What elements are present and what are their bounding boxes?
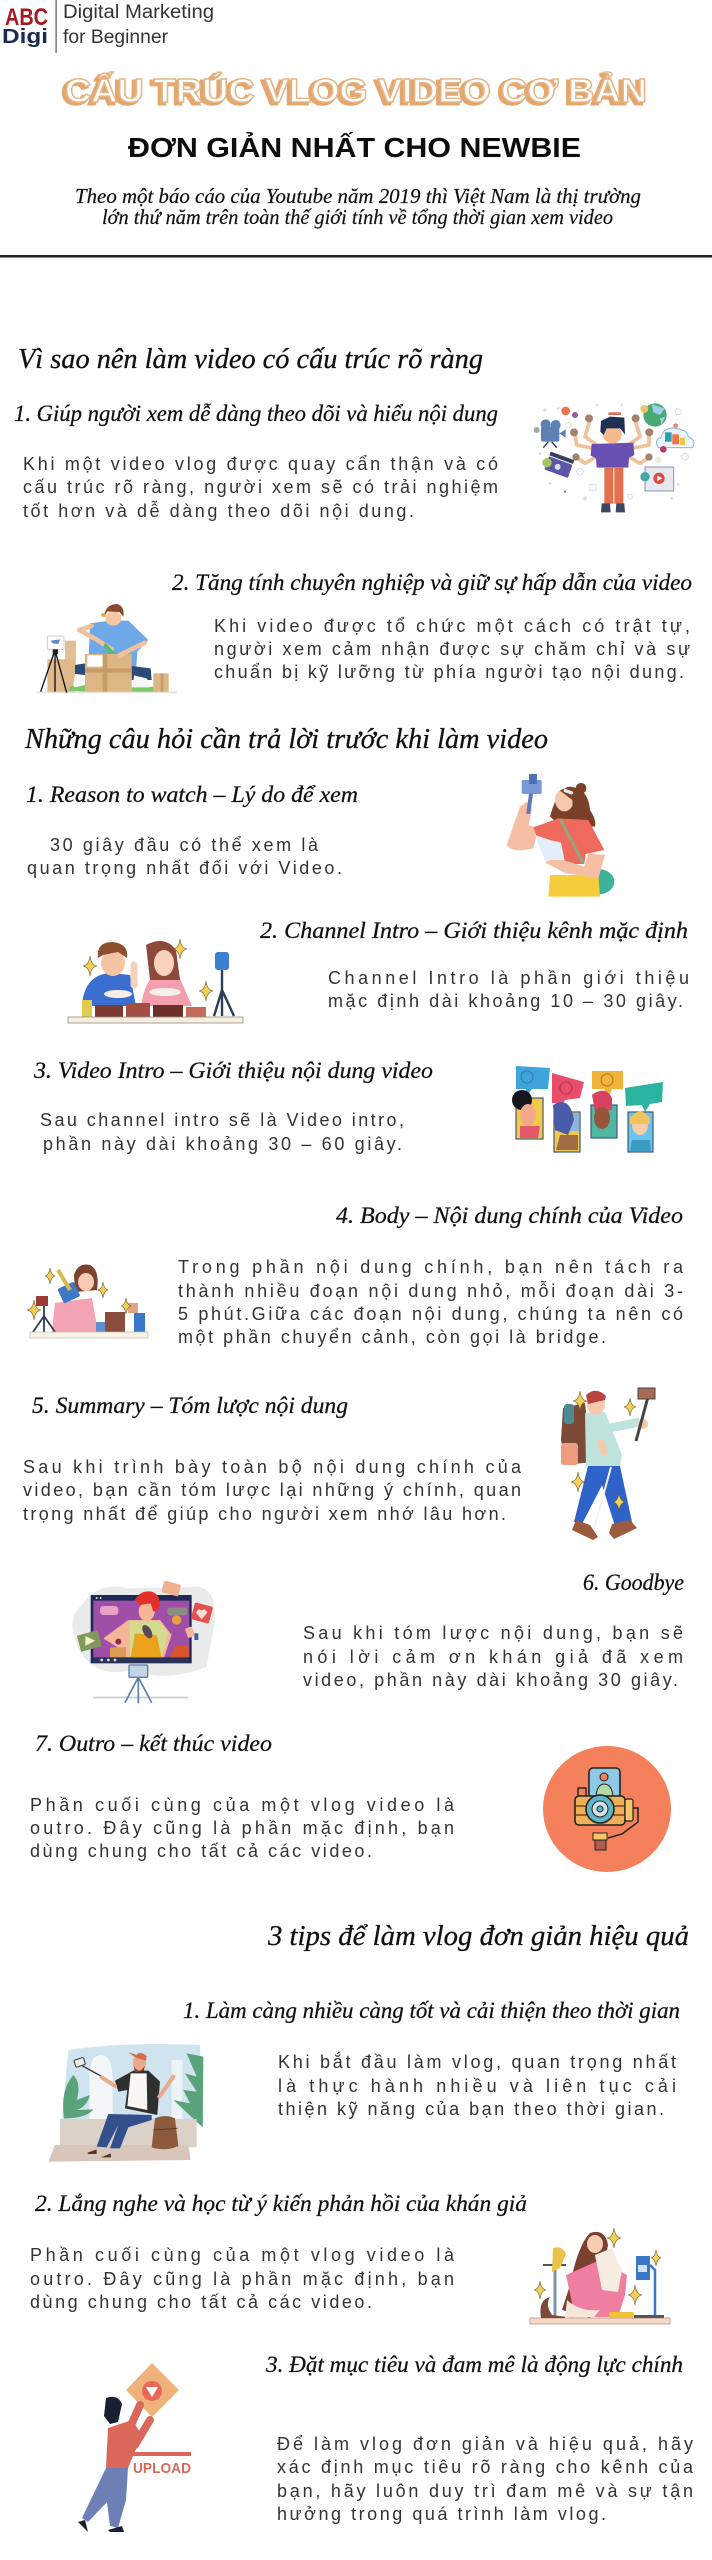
icon: multi-armed creator <box>534 403 694 512</box>
text block <box>23 1457 522 1524</box>
text block: người xem cảm nhận được sự chăm chỉ và sự <box>214 639 690 659</box>
text block: thiện kỹ năng của bạn theo thời gian. <box>278 2099 664 2119</box>
heading: 3. Video Intro – Giới thiệu nội dung video <box>33 1058 433 1083</box>
text block: video, bạn cần tóm lược lại những ý chính, quan <box>23 1480 521 1500</box>
text block <box>178 1257 684 1347</box>
section heading: why structure: Vì sao nên làm video có cấu trúc rõ ràng <box>18 344 483 375</box>
icon: man vlogging on bench <box>48 2044 204 2162</box>
text block: dùng chung cho tất cả các video. <box>30 2292 372 2312</box>
icon: screen on tripod <box>72 1581 215 1703</box>
intro text: Theo một báo cáo của Youtube năm 2019 thì Việt Nam là thị trường <box>75 184 641 208</box>
panel: summary <box>23 1388 655 1540</box>
heading: 3. Đặt mục tiêu và đam mê là động lực chính <box>265 2352 683 2377</box>
logo <box>2 0 214 53</box>
text block: Sau khi trình bày toàn bộ nội dung chính của <box>23 1457 522 1477</box>
panel: outro <box>30 1731 671 1872</box>
text block: video, phần này dài khoảng 30 giây. <box>303 1670 678 1690</box>
heading: 6. Goodbye <box>583 1570 684 1595</box>
text block: hưởng trong quá trình làm vlog. <box>277 2504 606 2524</box>
text block: Phần cuối cùng của một vlog video là <box>30 1795 455 1815</box>
intro text <box>75 184 641 229</box>
section heading: tips: 3 tips để làm vlog đơn giản hiệu quả <box>267 1921 689 1952</box>
panel: reason 2 <box>37 570 692 693</box>
heading: 5. Summary – Tóm lược nội dung <box>32 1393 348 1418</box>
icon: woman filming a product <box>27 1264 148 1338</box>
icon: person uploading video: UPLOAD <box>133 2460 191 2477</box>
icon: camera on orange circle <box>543 1746 671 1872</box>
text block: Channel Intro là phần giới thiệu <box>328 968 689 988</box>
panel: channel intro <box>68 918 689 1023</box>
heading: 2. Lắng nghe và học từ ý kiến phản hồi của khán giả <box>35 2191 527 2216</box>
heading: 1. Làm càng nhiều càng tốt và cải thiện theo thời gian <box>183 1998 680 2023</box>
text block <box>23 454 498 521</box>
icon: person uploading video <box>78 2363 191 2532</box>
panel: tip 1 <box>48 1998 680 2162</box>
text block: Phần cuối cùng của một vlog video là <box>30 2245 455 2265</box>
title: CẤU TRÚC VLOG VIDEO CƠ BẢN <box>62 74 644 111</box>
logo: ABC <box>5 4 48 31</box>
text block: nói lời cảm ơn khán giả đã xem <box>303 1647 683 1667</box>
text block <box>278 2051 676 2119</box>
text block: phần này dài khoảng 30 – 60 giây. <box>43 1134 402 1154</box>
text block: 5 phút.Giữa các đoạn nội dung, chúng ta nên có <box>178 1304 683 1324</box>
icon: people with speech bubbles <box>512 1066 663 1152</box>
panel: body <box>27 1203 684 1347</box>
text block: là thực hành nhiều và liên tục cải <box>278 2076 676 2096</box>
icon: woman with pets <box>530 2228 670 2324</box>
text block <box>277 2434 694 2524</box>
logo: Digi <box>2 26 48 48</box>
text block: Trong phần nội dung chính, bạn nên tách ra <box>178 1257 684 1277</box>
heading: 1. Reason to watch – Lý do để xem <box>26 782 358 807</box>
text block <box>40 1110 404 1154</box>
panel: tip 2 <box>30 2191 670 2324</box>
text block: Khi video được tổ chức một cách có trật tự, <box>214 616 690 636</box>
heading: 4. Body – Nội dung chính của Video <box>336 1203 683 1228</box>
text block: một phần chuyển cảnh, còn gọi là bridge. <box>178 1327 606 1347</box>
text block <box>30 2245 455 2312</box>
text block: mặc định dài khoảng 10 – 30 giây. <box>328 991 683 1011</box>
text block <box>27 835 342 878</box>
text block: Khi một video vlog được quay cẩn thận và có <box>23 454 498 474</box>
text block: outro. Đây cũng là phần mặc định, bạn <box>30 1818 454 1838</box>
text block: chuẩn bị kỹ lưỡng từ phía người tạo nội dung. <box>214 662 684 682</box>
heading: 7. Outro – kết thúc video <box>35 1731 272 1756</box>
heading: 1. Giúp người xem dễ dàng theo dõi và hiểu nội dung <box>14 401 498 426</box>
text block: thành nhiều đoạn nội dung nhỏ, mỗi đoạn dài 3- <box>178 1280 683 1301</box>
text block: Sau khi tóm lược nội dung, bạn sẽ <box>303 1623 683 1643</box>
icon: hiker with selfie stick <box>561 1388 655 1540</box>
icon: woman with selfie stick <box>507 774 614 897</box>
text block <box>214 616 690 682</box>
text block: Sau channel intro sẽ là Video intro, <box>40 1110 404 1130</box>
panel: reason to watch <box>26 774 614 897</box>
text block: Khi bắt đầu làm vlog, quan trọng nhất <box>278 2051 676 2072</box>
intro text: lớn thứ năm trên toàn thế giới tính về tổng thời gian xem video <box>102 205 613 229</box>
icon: couple eating on camera <box>68 939 243 1023</box>
text block: xác định mục tiêu rõ ràng cho kênh của <box>277 2457 694 2477</box>
title: CẤU TRÚC VLOG VIDEO CƠ BẢN <box>65 72 647 109</box>
panel: video intro <box>33 1058 663 1154</box>
text block: bạn, hãy luôn duy trì đam mê và sự tận <box>277 2481 693 2501</box>
panel: tip 3 <box>78 2352 694 2532</box>
text block: quan trọng nhất đối với Video. <box>27 858 342 878</box>
text block <box>328 968 689 1011</box>
text block: tốt hơn và dễ dàng theo dõi nội dung. <box>23 500 414 521</box>
text block <box>30 1795 455 1861</box>
icon: man packing boxes with tripod <box>37 604 177 693</box>
heading: 2. Tăng tính chuyên nghiệp và giữ sự hấp dẫn của video <box>172 570 692 595</box>
logo: for Beginner <box>63 27 169 48</box>
text block: trọng nhất để giúp cho người xem nhớ lâu hơn. <box>23 1504 506 1524</box>
text block: 30 giây đầu có thể xem là <box>50 835 319 855</box>
section heading: questions: Những câu hỏi cần trả lời trước khi làm video <box>24 724 548 755</box>
logo: Digital Marketing <box>63 2 214 23</box>
heading: 2. Channel Intro – Giới thiệu kênh mặc định <box>260 918 688 943</box>
text block: dùng chung cho tất cả các video. <box>30 1841 372 1861</box>
text block <box>303 1623 683 1690</box>
panel: reason 1 <box>14 401 694 521</box>
text block: outro. Đây cũng là phần mặc định, bạn <box>30 2269 454 2289</box>
text block: Để làm vlog đơn giản và hiệu quả, hãy <box>277 2434 693 2454</box>
text block: cấu trúc rõ ràng, người xem sẽ có trải nghiệm <box>23 477 498 497</box>
panel: goodbye <box>72 1570 684 1703</box>
subtitle: ĐƠN GIẢN NHẤT CHO NEWBIE <box>128 131 581 163</box>
